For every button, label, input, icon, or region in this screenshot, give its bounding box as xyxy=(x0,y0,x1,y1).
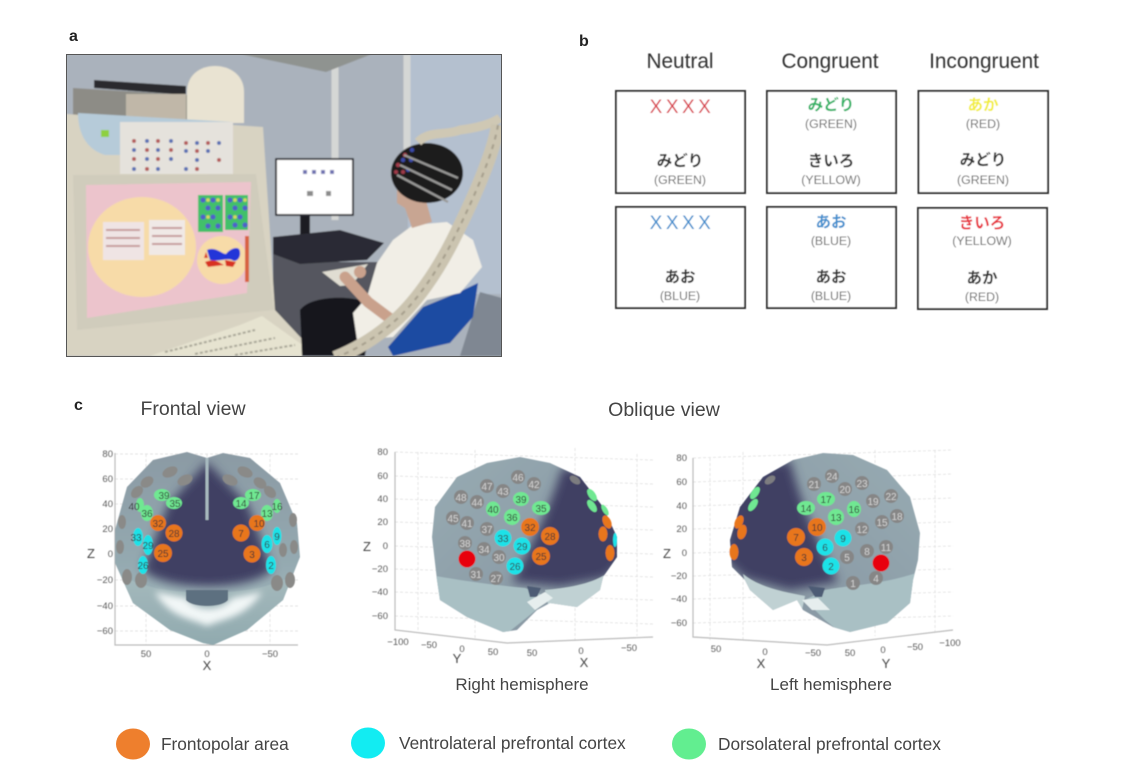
left plot axes and ticks: 0 xyxy=(762,647,768,658)
left highlighted channel xyxy=(872,554,890,572)
right grey channels: 27 xyxy=(490,574,502,585)
frontal ventrolateral channels: 29 xyxy=(142,541,154,552)
left frontopolar channels: 10 xyxy=(811,523,823,534)
left grey channels: 20 xyxy=(839,485,851,496)
frontal axes and ticks: −50 xyxy=(262,649,278,660)
electrode cap dots xyxy=(394,153,407,174)
channel table right xyxy=(149,220,185,255)
card: incongruent red: あか xyxy=(966,269,998,287)
right plot axes and ticks: −50 xyxy=(421,640,437,651)
left plot axes and ticks: Y xyxy=(882,656,891,671)
frontal dorsolateral channels: 16 xyxy=(271,502,283,513)
right grey channels: 46 xyxy=(512,473,524,484)
frontal axes and ticks: Z xyxy=(87,546,95,561)
left dorsolateral channels: 13 xyxy=(830,513,842,524)
right plot axes and ticks: X xyxy=(580,655,589,670)
arm xyxy=(345,277,392,320)
keyboard on desk xyxy=(322,264,368,286)
channel tables xyxy=(103,222,144,260)
right grey channels: 43 xyxy=(497,487,509,498)
frontal ventrolateral channels: 6 xyxy=(264,540,270,551)
right grey channels: 42 xyxy=(528,480,540,491)
card: congruent blue: (BLUE) xyxy=(811,234,851,248)
right plot axes and ticks: −100 xyxy=(387,637,409,648)
left grey channels: 23 xyxy=(856,479,868,490)
machine body xyxy=(66,114,318,356)
baseboard xyxy=(460,292,502,356)
colour grid 2 xyxy=(225,195,248,230)
left plot axes and ticks: 0 xyxy=(880,645,886,656)
right frontopolar channels: 25 xyxy=(535,552,547,563)
frontal frontopolar channels: 28 xyxy=(168,529,180,540)
left dorsolateral channels: 16 xyxy=(848,505,860,516)
right grey channels: 48 xyxy=(455,493,467,504)
heading: Congruent: Congruent xyxy=(781,50,879,73)
keyboard xyxy=(153,316,302,356)
right plot axes and ticks: 0 xyxy=(459,644,465,655)
card: incongruent red: (RED) xyxy=(965,290,999,304)
frontal brain surface xyxy=(110,450,305,650)
right grey channels: 44 xyxy=(471,498,483,509)
hand xyxy=(354,266,366,278)
left ventrolateral channels: 9 xyxy=(840,534,846,545)
frontal ventrolateral channels: 26 xyxy=(137,561,149,572)
left grey channels: 5 xyxy=(844,553,850,564)
chair xyxy=(388,283,478,356)
right plot axes and ticks: −40 xyxy=(372,587,388,598)
frontal axes and ticks: X xyxy=(203,658,212,673)
desk xyxy=(273,230,384,264)
monitor screen xyxy=(86,182,251,318)
wall seam strips xyxy=(335,55,407,220)
right brain surface xyxy=(428,450,625,640)
frontal ventrolateral channels xyxy=(130,527,282,574)
frontal dorsolateral channels: 35 xyxy=(169,499,181,510)
left plot axes and ticks: 0 xyxy=(682,548,687,559)
head bands xyxy=(397,155,458,202)
right ventrolateral channels: 33 xyxy=(497,534,509,545)
caption: Left hemisphere: Left hemisphere xyxy=(770,675,892,694)
frontal frontopolar channels: 32 xyxy=(152,519,164,530)
frontal dorsolateral channels: 14 xyxy=(235,499,247,510)
right dorsolateral channels: 40 xyxy=(487,505,499,516)
right plot axes and ticks: 50 xyxy=(488,647,498,658)
left grey channels: 11 xyxy=(881,543,892,554)
card: congruent green xyxy=(767,91,896,193)
frontal axes and ticks: 50 xyxy=(141,649,151,660)
card: neutral blue xyxy=(616,207,745,308)
right ventrolateral channels: 29 xyxy=(516,542,528,553)
right grey channels xyxy=(446,470,541,585)
large head map xyxy=(88,197,196,297)
frontal frontopolar channels: 7 xyxy=(238,529,244,540)
left grey channels: 4 xyxy=(873,574,879,585)
frontal frontopolar channels: 10 xyxy=(253,519,265,530)
left grey channels: 1 xyxy=(850,579,856,590)
frontal frontopolar channels xyxy=(150,515,265,562)
left dorsolateral channels: 17 xyxy=(820,495,832,506)
right dorsolateral channels: 39 xyxy=(515,495,527,506)
rear equipment shelf xyxy=(72,88,188,120)
panel b: Stroop task stimuli xyxy=(616,50,1048,309)
shirt xyxy=(353,222,482,340)
monitor bezel xyxy=(73,174,274,330)
right plot axes and ticks: 40 xyxy=(377,494,388,505)
right plot axes and ticks: −50 xyxy=(621,643,637,654)
frontal dorsolateral channels: 13 xyxy=(261,509,273,520)
left plot axes and ticks: 80 xyxy=(676,453,687,464)
card: congruent green: みどり xyxy=(808,96,854,114)
left frontopolar channels: 3 xyxy=(801,553,807,564)
card: incongruent yellow: (RED) xyxy=(966,117,1000,131)
card: congruent green: きいろ xyxy=(808,152,854,170)
mannequin face xyxy=(126,94,186,124)
right frontopolar channels xyxy=(521,518,559,565)
frontal dorsolateral channels: 36 xyxy=(141,509,153,520)
right grey channels: 31 xyxy=(470,570,482,581)
card: neutral blue: あお xyxy=(664,268,696,286)
left ventrolateral channels: 2 xyxy=(828,562,834,573)
card: neutral red: XXXX xyxy=(650,97,714,118)
frontal axes and ticks: 80 xyxy=(102,449,113,460)
card: neutral red xyxy=(616,91,745,193)
frontal dorsolateral channels: 17 xyxy=(248,491,260,502)
right grey channels: 38 xyxy=(459,539,471,550)
stimulus monitor xyxy=(275,158,354,216)
legend: frontopolar area: Frontopolar area xyxy=(161,734,289,754)
left plot axes and ticks: −100 xyxy=(939,638,961,649)
chart: left hemisphere brain xyxy=(663,450,961,671)
frontal ventrolateral channels: 2 xyxy=(268,561,274,572)
frontal axes and ticks xyxy=(87,449,298,673)
right plot axes and ticks: Y xyxy=(453,651,462,666)
right frontopolar channels: 32 xyxy=(524,523,536,534)
electrode cap dots blue xyxy=(401,148,414,172)
card: congruent blue: (BLUE) xyxy=(811,289,851,303)
right plot axes and ticks: 20 xyxy=(377,517,388,528)
colour grid 1 xyxy=(198,195,223,232)
paper dots blue xyxy=(132,139,221,171)
paper dots xyxy=(132,139,221,171)
frontal dorsolateral channels xyxy=(128,489,283,521)
right ventrolateral channels xyxy=(494,530,530,574)
legend: ventrolateral prefrontal cortex xyxy=(351,728,626,758)
panel label c: c xyxy=(74,397,83,414)
right grey channels: 30 xyxy=(493,553,505,564)
left ventrolateral channels: 6 xyxy=(822,543,828,554)
grid blue nodes xyxy=(200,197,248,229)
colour scale xyxy=(245,236,249,282)
neck and face xyxy=(397,183,432,228)
left grey channels: 15 xyxy=(876,518,888,529)
card: incongruent red xyxy=(918,208,1047,309)
right highlighted channel xyxy=(458,550,476,568)
card: neutral blue: XXXX xyxy=(650,213,714,234)
fibre bundle xyxy=(335,125,498,358)
frontal axes and ticks: −40 xyxy=(97,601,113,612)
card: incongruent yellow xyxy=(918,91,1048,193)
card: incongruent yellow: (GREEN) xyxy=(957,173,1009,187)
frontal axes and ticks: 0 xyxy=(204,649,210,660)
left plot axes and ticks: 50 xyxy=(845,648,855,659)
shelf top xyxy=(94,80,186,95)
left plot axes and ticks: Z xyxy=(663,546,671,561)
heading: Frontal view: Frontal view xyxy=(140,398,246,420)
keyboard keys xyxy=(165,330,295,355)
right plot axes and ticks: −20 xyxy=(372,564,388,575)
right plot axes and ticks: 0 xyxy=(383,541,388,552)
left plot axes and ticks: 50 xyxy=(711,644,721,655)
frontal axes and ticks: 0 xyxy=(108,549,113,560)
right plot axes and ticks: −60 xyxy=(372,611,388,622)
card: congruent blue: あお xyxy=(815,213,847,231)
chart: frontal view brain xyxy=(87,449,305,673)
panel label b: b xyxy=(579,33,589,50)
left plot axes and ticks: X xyxy=(757,656,766,671)
frontal frontopolar channels: 25 xyxy=(157,549,169,560)
right side channels xyxy=(568,474,617,561)
right plot axes and ticks: Z xyxy=(363,539,371,554)
right grey channels: 45 xyxy=(447,514,459,525)
stimulus screen xyxy=(277,160,352,214)
right plot axes and ticks xyxy=(363,447,653,670)
frontal axes and ticks: −60 xyxy=(97,626,113,637)
right grey channels: 41 xyxy=(461,519,473,530)
frontal grey channels xyxy=(116,464,298,591)
left plot axes and ticks: −20 xyxy=(671,571,687,582)
left plot axes and ticks: −40 xyxy=(671,594,687,605)
right wall xyxy=(408,54,502,294)
frontal dorsolateral channels: 40 xyxy=(128,502,140,513)
heading: Neutral: Neutral xyxy=(646,50,714,73)
frontal axes and ticks: 60 xyxy=(102,474,113,485)
left plot axes and ticks: −60 xyxy=(671,618,687,629)
panel a: photograph of experiment setup xyxy=(66,54,502,358)
card: neutral blue: (BLUE) xyxy=(660,289,700,303)
chart: right hemisphere brain xyxy=(363,447,653,670)
left grey channels xyxy=(807,469,904,590)
left plot axes and ticks: −50 xyxy=(907,642,923,653)
small head map xyxy=(197,236,247,284)
left plot axes and ticks xyxy=(663,450,961,671)
right dorsolateral channels xyxy=(486,492,550,525)
left plot axes and ticks: −50 xyxy=(805,648,821,659)
under-desk shadow xyxy=(273,250,385,356)
card: incongruent red: きいろ xyxy=(959,214,1005,232)
panel label a: a xyxy=(69,28,78,45)
frontal axes and ticks: −20 xyxy=(97,575,113,586)
left frontopolar channels: 7 xyxy=(793,533,799,544)
left grey channels: 12 xyxy=(856,525,868,536)
heading: Incongruent: Incongruent xyxy=(929,50,1039,73)
card: neutral red: みどり xyxy=(657,152,703,170)
right grey channels: 47 xyxy=(481,482,493,493)
trousers xyxy=(300,298,365,356)
frontal frontopolar channels: 3 xyxy=(249,550,255,561)
right frontopolar channels: 28 xyxy=(544,532,556,543)
left grey channels: 18 xyxy=(891,512,903,523)
card: congruent blue: あお xyxy=(815,268,847,286)
left dorsolateral channels: 14 xyxy=(800,504,812,515)
frontal axes and ticks: 20 xyxy=(102,524,113,535)
left grey channels: 22 xyxy=(885,492,897,503)
left grey channels: 19 xyxy=(867,497,879,508)
left grey channels: 8 xyxy=(864,547,870,558)
red activation map xyxy=(204,252,236,267)
frontal axes and ticks: 40 xyxy=(102,499,113,510)
left frontopolar channels xyxy=(787,518,826,566)
right ventrolateral channels: 26 xyxy=(509,562,521,573)
fibre bundle texture xyxy=(335,125,498,358)
photo frame xyxy=(66,54,502,356)
left plot axes and ticks: 20 xyxy=(676,524,687,535)
left dorsolateral channels xyxy=(797,492,861,525)
caption: Right hemisphere: Right hemisphere xyxy=(455,675,589,694)
monitor stand xyxy=(299,215,311,236)
left side channels xyxy=(730,474,777,560)
left plot axes and ticks: 40 xyxy=(676,501,687,512)
frontal dorsolateral channels: 39 xyxy=(158,491,170,502)
card: congruent green: (GREEN) xyxy=(805,117,857,131)
left grey channels: 21 xyxy=(808,480,820,491)
card: incongruent yellow: みどり xyxy=(960,151,1006,169)
fibre bundle upper xyxy=(418,118,500,142)
wall xyxy=(66,54,502,357)
card: congruent blue xyxy=(767,207,896,308)
dome xyxy=(187,66,244,123)
right plot axes and ticks: 60 xyxy=(377,471,388,482)
left brain surface xyxy=(725,450,925,640)
frontal ventrolateral channels: 9 xyxy=(274,532,280,543)
legend: frontopolar area xyxy=(116,728,289,760)
right plot axes and ticks: 80 xyxy=(377,447,388,458)
legend: dorsolateral prefrontal cortex xyxy=(672,728,941,760)
right grey channels: 34 xyxy=(478,545,490,556)
table marks xyxy=(106,228,182,246)
left plot axes and ticks: 60 xyxy=(676,477,687,488)
left grey channels: 24 xyxy=(826,472,838,483)
right grey channels: 37 xyxy=(481,525,493,536)
card: congruent green: (YELLOW) xyxy=(801,173,861,187)
grid yellow nodes xyxy=(206,198,247,219)
card: neutral red: (GREEN) xyxy=(654,173,706,187)
left ventrolateral channels xyxy=(816,530,852,574)
blue activation map xyxy=(207,248,240,261)
green indicator xyxy=(101,130,109,137)
stimulus marks xyxy=(303,170,334,174)
ceiling shelf xyxy=(240,54,372,72)
right dorsolateral channels: 36 xyxy=(506,513,518,524)
blue panel xyxy=(78,113,233,155)
card: incongruent yellow: あか xyxy=(967,96,999,114)
frontal ventrolateral channels: 33 xyxy=(130,533,142,544)
legend: dorsolateral prefrontal cortex: Dorsolateral prefrontal cortex xyxy=(718,734,941,754)
legend: ventrolateral prefrontal cortex: Ventrolateral prefrontal cortex xyxy=(399,733,626,753)
hair xyxy=(391,143,463,203)
stimulus kana xyxy=(307,191,331,196)
right plot axes and ticks: 0 xyxy=(578,646,584,657)
right dorsolateral channels: 35 xyxy=(535,504,547,515)
card: incongruent red: (YELLOW) xyxy=(952,234,1012,248)
heading: Oblique view: Oblique view xyxy=(608,399,721,421)
paper chart xyxy=(120,122,233,174)
right plot axes and ticks: 50 xyxy=(527,648,537,659)
